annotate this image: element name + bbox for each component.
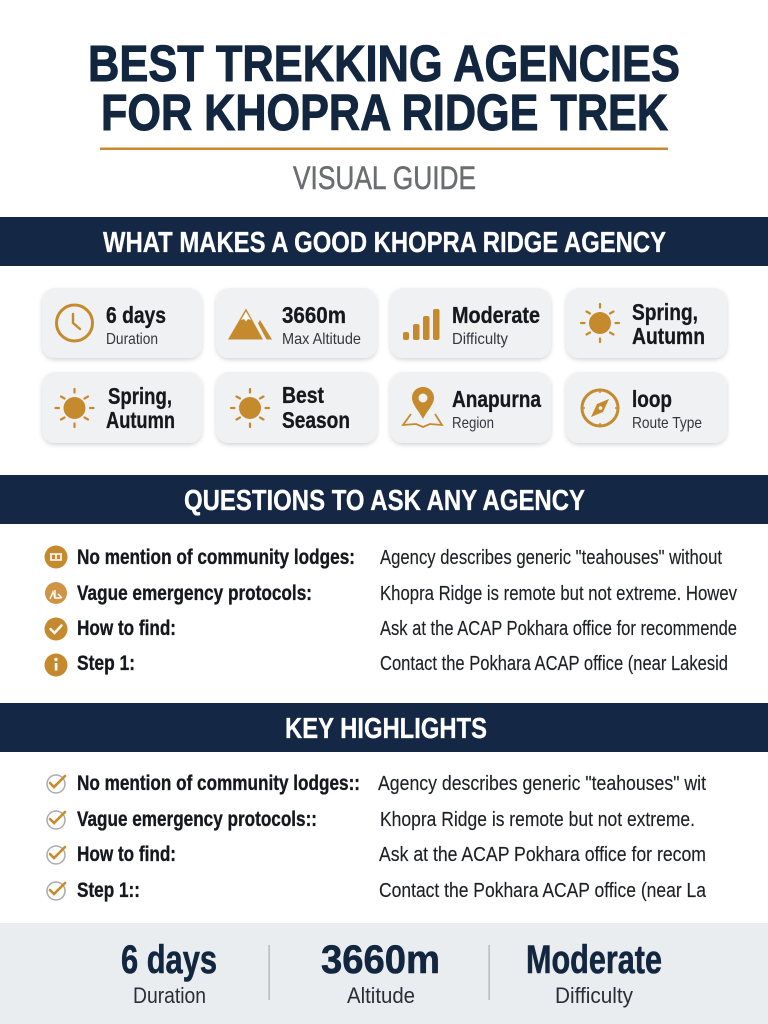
icon: info badge (44, 654, 68, 676)
panel: key highlights list (47, 772, 707, 902)
row: emergency protocols (47, 808, 695, 831)
subtitle: VISUAL GUIDE (293, 160, 476, 196)
card: difficulty: Moderate (452, 302, 540, 328)
row: step 1 (44, 652, 728, 676)
stat: difficulty (526, 938, 662, 1008)
stat: duration: Duration (133, 983, 206, 1008)
card: route type (566, 372, 727, 443)
row: how to find (44, 617, 737, 640)
icon: compass (582, 390, 618, 426)
card: duration (42, 288, 202, 358)
section band: key highlights: KEY HIGHLIGHTS (285, 713, 487, 745)
row: how to find: How to find: (77, 617, 176, 640)
row: emergency protocols (45, 582, 737, 605)
icon: check mark (47, 775, 65, 793)
stat: altitude: 3660m (321, 938, 440, 982)
icon: sun (231, 389, 269, 427)
section band: key highlights (0, 703, 768, 752)
card: difficulty (390, 288, 551, 358)
title (88, 35, 680, 141)
title: FOR KHOPRA RIDGE TREK (101, 84, 668, 141)
card: region (390, 372, 551, 443)
icon: sun (581, 304, 619, 342)
card: route type: Route Type (632, 415, 702, 432)
card: spring autumn (566, 288, 727, 358)
row: how to find: Ask at the ACAP Pokhara office for recom (379, 844, 706, 866)
row: how to find: How to find: (77, 843, 176, 866)
card: spring autumn: Autumn (632, 323, 705, 349)
row: community lodges (47, 772, 706, 795)
stat: difficulty: Moderate (526, 938, 662, 982)
icon: lodge badge (44, 546, 68, 568)
row: community lodges: Agency describes generic "teahouses" wit (378, 773, 706, 795)
card: spring autumn: Spring, (632, 299, 698, 325)
card: duration: 6 days (106, 302, 166, 328)
card: season autumn: Autumn (106, 407, 175, 433)
section band: what makes a good agency: WHAT MAKES A GOOD KHOPRA RIDGE AGENCY (103, 227, 666, 259)
row: step 1 (47, 879, 707, 902)
icon: clock (56, 305, 92, 341)
section band: questions to ask: QUESTIONS TO ASK ANY AGENCY (184, 485, 585, 517)
row: community lodges (44, 546, 722, 569)
row: step 1: Step 1:: (77, 879, 140, 902)
section band: what makes a good agency (0, 217, 768, 266)
row: community lodges: No mention of community lodges:: (77, 772, 360, 795)
card: season autumn: Spring, (108, 383, 172, 409)
row: step 1: Contact the Pokhara ACAP office (near La (379, 880, 707, 902)
section band: questions to ask (0, 475, 768, 524)
card: region: Region (452, 415, 494, 432)
icon: emergency badge (45, 582, 67, 604)
stat: duration (121, 938, 217, 1008)
stat: altitude (321, 938, 440, 1008)
stat: altitude: Altitude (347, 983, 415, 1008)
card: season autumn (42, 372, 202, 443)
card: best season: Season (282, 407, 350, 433)
footer stats (0, 923, 768, 1024)
card: best season: Best (282, 382, 324, 408)
icon: signal bars (403, 309, 440, 340)
icon: check mark (47, 882, 65, 900)
stat: duration: 6 days (121, 938, 217, 982)
icon: check badge (44, 618, 68, 640)
card: max altitude (216, 288, 377, 358)
card: max altitude: Max Altitude (282, 331, 361, 348)
card: best season (216, 372, 377, 443)
panel: stat cards (42, 288, 727, 443)
stat: difficulty: Difficulty (555, 983, 633, 1008)
row: how to find (47, 843, 706, 866)
card: max altitude: 3660m (282, 302, 346, 328)
row: step 1: Step 1: (77, 652, 135, 675)
card: difficulty: Difficulty (452, 331, 508, 348)
card: region: Anapurna (452, 386, 541, 412)
row: emergency protocols: Vague emergency protocols:: (77, 808, 317, 831)
row: emergency protocols: Khopra Ridge is remote but not extreme. (380, 809, 695, 831)
row: emergency protocols: Vague emergency protocols: (77, 582, 312, 605)
row: community lodges: No mention of community lodges: (77, 546, 355, 569)
icon: mountain (228, 308, 272, 340)
title: BEST TREKKING AGENCIES (88, 35, 680, 92)
panel: questions list (44, 546, 737, 676)
icon: check mark (47, 811, 65, 829)
icon: sun (56, 389, 94, 427)
icon: check mark (47, 846, 65, 864)
card: route type: loop (632, 386, 672, 412)
icon: map pin (403, 387, 442, 427)
card: duration: Duration (106, 331, 158, 348)
